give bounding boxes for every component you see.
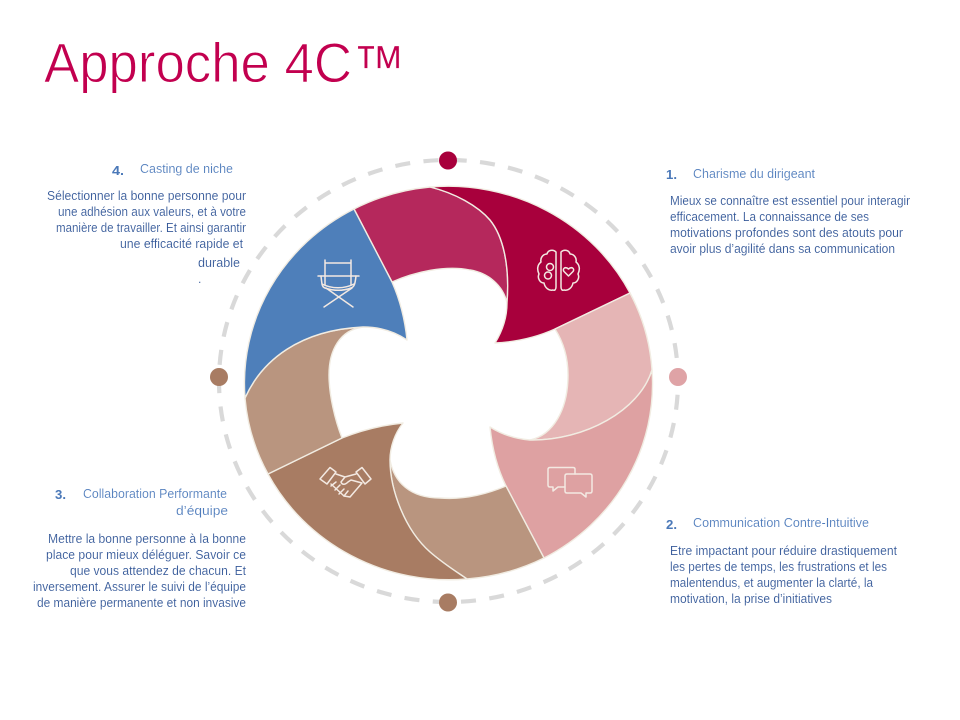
body text 4: une efficacité rapide et: [120, 237, 244, 251]
body text 3: inversement. Assurer le suivi de l’équipe: [33, 580, 246, 594]
body text 4: [47, 189, 246, 286]
segment: pink communication: [490, 370, 653, 558]
icon: director chair: [318, 260, 359, 307]
segment: blue casting: [244, 209, 407, 398]
heading number 4: 4.: [112, 164, 124, 178]
heading number 1: 1.: [666, 168, 677, 182]
text block: 3 Collaboration Performante d'équipe: [33, 487, 247, 610]
heading number 3: 3.: [55, 488, 66, 502]
text block: 2 Communication Contre-Intuitive: [666, 516, 898, 606]
body text 4: .: [198, 272, 201, 286]
title: ™: [353, 33, 405, 100]
heading 4: Casting de niche: [140, 162, 233, 176]
marker dot: left: [210, 368, 228, 386]
segment: light pink: [530, 293, 652, 440]
body text 2: Etre impactant pour réduire drastiquement: [670, 544, 898, 558]
body text 3: Mettre la bonne personne à la bonne: [48, 532, 246, 546]
segment: crimson: [354, 187, 508, 303]
heading 2: Communication Contre-Intuitive: [693, 516, 869, 530]
body text 2: [670, 544, 898, 606]
body text 3: place pour mieux déléguer. Savoir ce: [46, 548, 246, 562]
icon: chat bubbles: [548, 468, 592, 497]
heading 3: Collaboration Performante: [83, 487, 227, 501]
heading 3: [83, 487, 228, 518]
dashed ring: [219, 160, 678, 602]
body text 1: avoir plus d’agilité dans sa communication: [670, 242, 895, 256]
body text 4: durable: [198, 256, 240, 270]
body text 3: que vous attendez de chacun. Et: [70, 564, 247, 578]
text block: 4 Casting de niche: [47, 162, 246, 286]
icon: brain with gears and heart: [538, 250, 579, 290]
body text 1: efficacement. La connaissance de ses: [670, 210, 869, 224]
body text 4: manière de travailler. Et ainsi garantir: [56, 221, 246, 235]
body text 1: [670, 194, 910, 256]
heading number 2: 2.: [666, 518, 677, 532]
body text 2: les pertes de temps, les frustrations et les: [670, 560, 887, 574]
body text 3: [33, 532, 247, 610]
segment: taupe left: [245, 327, 363, 474]
heading 1: Charisme du dirigeant: [693, 167, 816, 181]
body text 4: une adhésion aux valeurs, et à votre: [58, 205, 246, 219]
segment: light taupe bottom: [390, 460, 544, 579]
body text 3: de manière permanente et non invasive: [37, 596, 246, 610]
icon: handshake: [320, 468, 371, 497]
marker dot: bottom: [439, 594, 457, 612]
body text 2: malentendus, et augmenter la clarté, la: [670, 576, 873, 590]
marker dot: right: [669, 368, 687, 386]
text block: 1 Charisme du dirigeant: [666, 167, 910, 256]
title: Approche 4C: [44, 31, 352, 94]
pinwheel diagram: [244, 186, 653, 580]
body text 4: Sélectionner la bonne personne pour: [47, 189, 246, 203]
body text 1: Mieux se connaître est essentiel pour interagir: [670, 194, 910, 208]
heading 3: d’équipe: [176, 504, 228, 518]
marker dot: top: [439, 152, 457, 170]
body text 2: motivation, la prise d’initiatives: [670, 592, 832, 606]
segment: brown collaboration: [268, 423, 467, 580]
segment: dark red charisme: [430, 186, 630, 343]
body text 1: motivations profondes sont des atouts pour: [670, 226, 903, 240]
